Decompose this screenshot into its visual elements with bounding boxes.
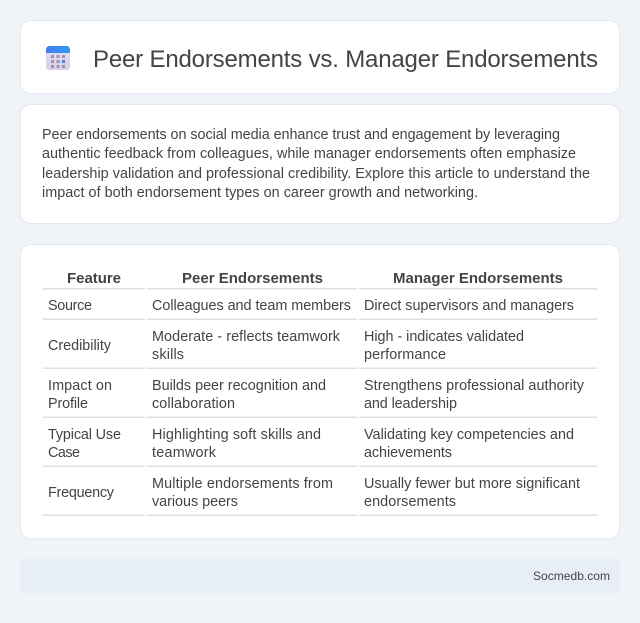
row: impact on profile: Strengthens professional authority <box>364 378 585 394</box>
row: typical use case: Highlighting soft skills and <box>152 427 321 443</box>
row: typical use case: Case <box>48 445 80 461</box>
row: typical use case <box>48 427 574 461</box>
row: credibility: Credibility <box>48 338 112 354</box>
row: credibility: skills <box>152 347 184 363</box>
footer bar <box>20 559 620 593</box>
intro text <box>42 127 590 201</box>
icon: calendar <box>46 46 70 70</box>
row: frequency: various peers <box>152 494 238 510</box>
intro text: leadership validation and professional credibility. Explore this article to understand the <box>42 166 590 182</box>
row: impact on profile: Impact on <box>48 378 112 394</box>
row: credibility: High - indicates validated <box>364 329 524 345</box>
row: typical use case: teamwork <box>152 445 217 461</box>
row: source: Direct supervisors and managers <box>364 298 574 314</box>
row: frequency: Multiple endorsements from <box>152 476 333 492</box>
table header row <box>67 270 563 287</box>
table header row: Manager Endorsements <box>393 270 563 287</box>
row: impact on profile: Builds peer recognition and <box>152 378 326 394</box>
row: frequency: endorsements <box>364 494 456 510</box>
row: credibility: performance <box>364 347 446 363</box>
panel: title header <box>20 20 620 94</box>
row: impact on profile: collaboration <box>152 396 235 412</box>
footer text: Socmedb.com <box>533 569 610 583</box>
title: Peer Endorsements vs. Manager Endorsements <box>93 46 598 73</box>
row: frequency: Usually fewer but more significant <box>364 476 580 492</box>
intro text: authentic feedback from colleagues, while manager endorsements often emphasize <box>42 146 576 162</box>
row: impact on profile: Profile <box>48 396 88 412</box>
row: source: Colleagues and team members <box>152 298 351 314</box>
row: source <box>48 298 574 314</box>
row: impact on profile: and leadership <box>364 396 457 412</box>
row: typical use case: Validating key competencies and <box>364 427 574 443</box>
row: typical use case: achievements <box>364 445 452 461</box>
row: credibility <box>48 329 524 363</box>
row: typical use case: Typical Use <box>48 427 121 443</box>
row: impact on profile <box>48 378 585 412</box>
panel: comparison table <box>20 244 620 538</box>
table header row: Feature <box>67 270 121 287</box>
row: frequency: Frequency <box>48 485 115 501</box>
row: source: Source <box>48 298 92 314</box>
panel: introduction <box>20 104 620 224</box>
intro text: Peer endorsements on social media enhance trust and engagement by leveraging <box>42 127 560 143</box>
intro text: impact of both endorsement types on career growth and networking. <box>42 185 478 201</box>
table header row: Peer Endorsements <box>182 270 323 287</box>
row: credibility: Moderate - reflects teamwork <box>152 329 341 345</box>
row: frequency <box>48 476 580 510</box>
